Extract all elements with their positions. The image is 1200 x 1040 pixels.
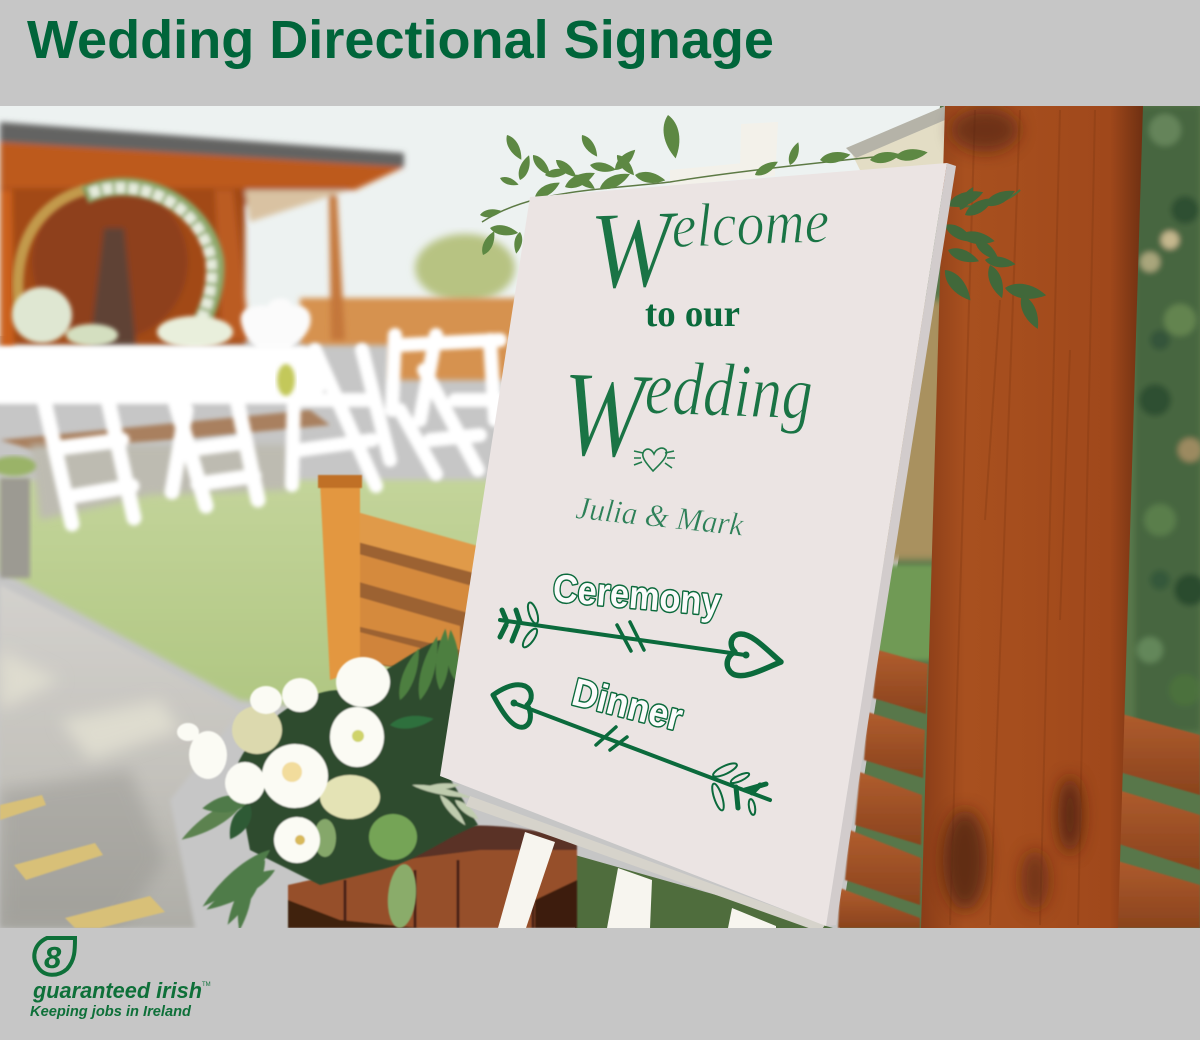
sky	[0, 106, 940, 336]
barrel dark lower right	[535, 880, 577, 928]
cabin roof	[0, 122, 404, 167]
foliage mass	[235, 640, 478, 885]
hydrangea lower	[320, 775, 380, 819]
pavement dark band	[0, 770, 165, 928]
guaranteed irish logo	[30, 938, 211, 1020]
cabin pillar	[215, 190, 250, 340]
welcome sign board	[440, 163, 947, 926]
rail 1	[360, 512, 476, 573]
logo wordmark: guaranteed irish	[32, 978, 202, 1003]
photo: wedding venue scene	[0, 106, 1200, 932]
icon: heart with rays	[634, 448, 675, 471]
arrow: dinner pointing left	[493, 685, 770, 815]
rail 2	[360, 554, 470, 613]
barrel body	[288, 850, 577, 928]
foreground right backdrop	[840, 106, 1200, 928]
sign side edge	[826, 163, 956, 926]
sign heading: Welcome: W	[588, 187, 682, 312]
top greenery branch	[479, 114, 928, 257]
fern top	[394, 628, 461, 702]
sign label: Ceremony: Ceremony	[551, 567, 723, 625]
sign heading: Wedding: edding	[644, 346, 814, 436]
footer band	[0, 928, 1200, 1040]
arrow: ceremony pointing right	[500, 601, 781, 676]
logo tagline: Keeping jobs in Ireland	[30, 1003, 192, 1020]
sign names: Julia & Mark	[574, 489, 746, 543]
far building edge	[850, 106, 945, 170]
floral base left	[12, 287, 72, 343]
floral arch	[12, 187, 233, 348]
pavement highlights	[0, 650, 180, 760]
barrel top	[400, 826, 577, 860]
bouquet	[177, 628, 481, 932]
wooden post	[921, 106, 1143, 928]
dark drape	[90, 228, 136, 345]
barrel	[288, 826, 577, 928]
leaf left upper	[201, 792, 251, 817]
paved walkway	[0, 588, 196, 928]
background fence	[300, 298, 525, 380]
title: Wedding Directional Signage	[27, 10, 774, 70]
right greenery branch	[940, 185, 1047, 332]
near left fence rails	[318, 475, 480, 680]
hydrangea	[232, 706, 282, 754]
barrel plank seams	[345, 850, 533, 928]
floral base right	[157, 316, 233, 348]
cabin	[0, 122, 404, 350]
fern lower left	[198, 844, 279, 932]
planter foliage	[0, 456, 36, 476]
lower ground between legs	[575, 855, 840, 930]
fence post cap	[318, 475, 362, 488]
cabin post	[329, 195, 345, 340]
easel legs	[498, 832, 776, 928]
far lawn	[0, 478, 486, 708]
fence post	[320, 482, 360, 680]
white heart decoration	[241, 298, 311, 350]
hedge	[1135, 106, 1200, 731]
barrel shadow	[288, 900, 420, 928]
aisle runner	[0, 410, 330, 452]
leaf dark left	[223, 801, 257, 843]
sign heading: to our: to our	[645, 293, 740, 335]
rail 3	[352, 595, 460, 650]
left pillar	[0, 190, 14, 350]
header band	[0, 0, 1200, 106]
trademark: TM	[202, 982, 211, 988]
floral base middle	[66, 324, 118, 346]
stone planter	[0, 478, 30, 578]
logo mark: 8	[44, 940, 62, 975]
blurred garden behind sign	[880, 300, 945, 560]
sign label: Dinner: Dinner	[568, 671, 687, 740]
sign heading: Wedding: W	[560, 346, 654, 484]
yellow chair accent	[277, 364, 295, 396]
white chairs	[0, 335, 500, 524]
right fence rails	[838, 650, 1200, 928]
grass behind sign	[875, 565, 935, 660]
white flowers	[177, 657, 390, 863]
chair 3	[292, 350, 390, 486]
arch interior	[32, 196, 188, 335]
chair 1	[44, 400, 134, 524]
leaf oval	[314, 819, 336, 857]
easel tray	[466, 796, 825, 932]
leaf dark top	[389, 713, 434, 731]
logo mark	[34, 938, 75, 975]
cabin eaves	[0, 142, 404, 190]
leaf left	[178, 794, 249, 846]
wood grain	[950, 110, 1095, 925]
silver fern	[411, 782, 481, 828]
stone planter wall	[30, 445, 290, 520]
leaf bottom	[385, 863, 419, 929]
easel top	[670, 122, 778, 186]
sign heading: Welcome: elcome	[670, 188, 830, 261]
wood knots	[943, 108, 1082, 910]
rail 4	[352, 630, 420, 670]
distant tree	[415, 234, 515, 302]
sign face	[440, 163, 947, 926]
cabin wall	[7, 184, 251, 348]
leaf round right	[369, 814, 417, 860]
chair back band	[0, 346, 300, 404]
flower centres	[282, 762, 302, 782]
yellow paving tiles	[0, 795, 165, 928]
chair 2	[172, 405, 258, 506]
cabin canopy	[245, 190, 350, 222]
chair 4	[392, 335, 500, 474]
wooden ring arch	[18, 190, 85, 320]
